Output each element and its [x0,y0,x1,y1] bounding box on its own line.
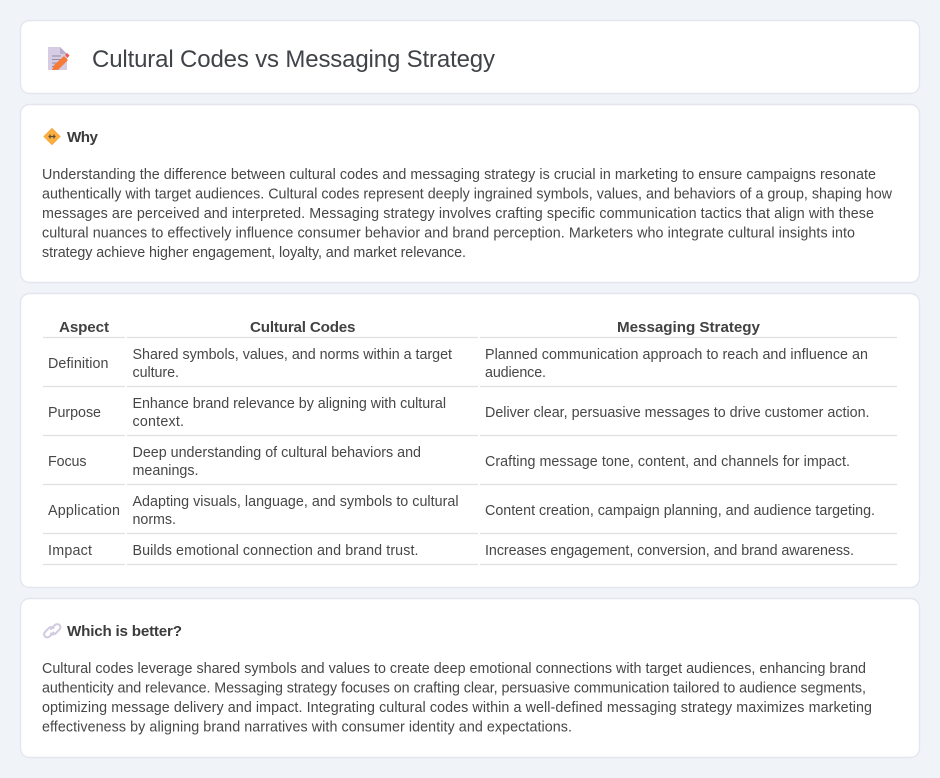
row: application [48,494,875,528]
text block: which is better body [42,661,872,736]
row: application: Content creation, campaign planning, and audience targeting. [485,503,875,519]
row: purpose: context. [132,414,184,430]
row: definition: Planned communication approach to reach and influence an [485,347,868,363]
text block: which is better body: effectiveness by aligning brand narratives with consumer identity and expectations. [42,720,572,736]
row: focus: Deep understanding of cultural behaviors and [132,445,421,461]
row: application: Application [48,503,120,519]
text block: why body: strategy achieve higher engagement, loyalty, and market relevance. [42,245,466,261]
icon: document with pencil [48,47,70,70]
row: impact: Increases engagement, conversion, and brand awareness. [485,543,854,559]
panel: comparison table [20,294,920,588]
row: purpose: Deliver clear, persuasive messages to drive customer action. [485,405,870,421]
row: impact [48,543,854,559]
row: application: norms. [132,512,176,528]
row: focus: meanings. [132,463,198,479]
row: impact: Impact [48,543,92,559]
title: Cultural Codes vs Messaging Strategy [92,46,495,73]
row: definition [48,347,868,381]
panel: why [20,104,920,282]
row: focus [48,445,850,479]
row: focus: Crafting message tone, content, and channels for impact. [485,454,850,470]
row: definition: Definition [48,356,109,372]
text block: which is better body: optimizing message delivery and impact. Integrating cultural codes within a well-defined messaging strategy maximizes marketing [42,700,872,716]
text block: why body: Understanding the difference between cultural codes and messaging strategy is crucial in marketing to ensure campaigns resonate [42,167,876,183]
table header: Messaging Strategy [617,319,761,336]
row: impact: Builds emotional connection and brand trust. [132,543,418,559]
row: definition: audience. [485,365,546,381]
text block: why body [42,167,893,261]
text block: why body: messages are perceived and interpreted. Messaging strategy involves crafting specific communication tactics that align with these [42,206,874,222]
row: purpose: Enhance brand relevance by aligning with cultural [132,396,446,412]
row: definition: culture. [132,365,179,381]
row: definition: Shared symbols, values, and norms within a target [132,347,452,363]
icon: orange diamond sign [44,128,60,144]
text block: which is better body: authenticity and relevance. Messaging strategy focuses on crafting clear, persuasive communication tailored to audience segments, [42,680,866,696]
table header: Aspect [59,319,109,336]
row: focus: Focus [48,454,86,470]
heading: why: Why [67,129,99,146]
panel: header [20,20,920,94]
icon: chain link [44,624,60,637]
text block: which is better body: Cultural codes leverage shared symbols and values to create deep emotional connections with target audiences, enhancing brand [42,661,866,677]
text block: why body: authentically with target audiences. Cultural codes represent deeply ingrained symbols, values, and behaviors of a group, shaping how [42,186,893,202]
row: application: Adapting visuals, language, and symbols to cultural [132,494,458,510]
heading: which is better: Which is better? [67,623,182,640]
table header: Cultural Codes [250,319,356,336]
table header [59,319,761,336]
row: purpose: Purpose [48,405,101,421]
panel: which is better [20,598,920,758]
row: purpose [48,396,870,430]
text block: why body: cultural nuances to effectively influence consumer behavior and brand perception. Marketers who integrate cultural insights into [42,226,855,242]
